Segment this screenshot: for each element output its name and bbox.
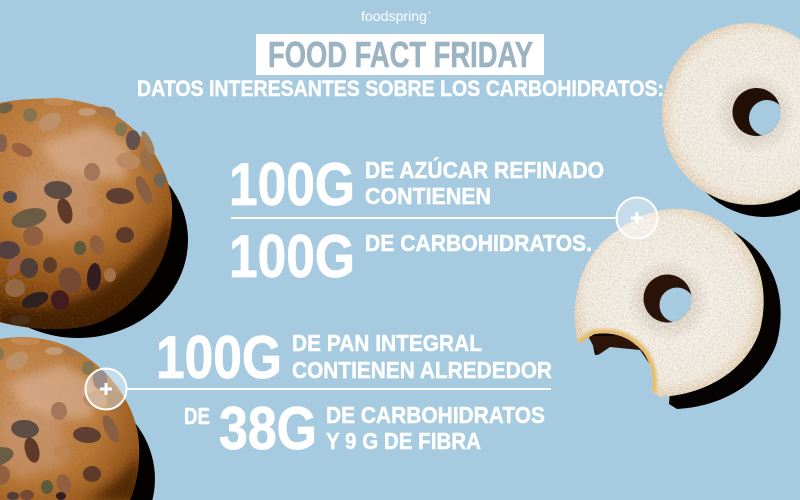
logo: foodspring: foodspring [361,9,427,24]
image: top bread roll [0,97,188,345]
fact: whole grain bread: DE [184,403,210,429]
fact: whole grain bread: 100G [156,324,282,391]
image: bottom bread roll [0,336,155,500]
fact: whole grain bread: DE PAN INTEGRAL [292,330,482,356]
fact: whole grain bread [127,324,552,462]
fact: refined sugar: DE AZÚCAR REFINADO [365,156,604,183]
fact: refined sugar [229,151,618,290]
subtitle: DATOS INTERESANTES SOBRE LOS CARBOHIDRATOS: [137,76,664,101]
fact: refined sugar: 100G [229,151,355,218]
fact: refined sugar: DE CARBOHIDRATOS. [365,230,592,256]
logo: foodspring: ® [428,10,431,15]
fact: whole grain bread: CONTIENEN ALREDEDOR [292,357,552,383]
title: Food Fact Friday: FOOD FACT FRIDAY [268,34,533,75]
fact: whole grain bread: 38G [219,395,317,462]
image: bitten sugar donut [574,208,781,409]
icon: plus circle on donut [616,198,658,238]
image: top sugar donut [662,22,800,217]
fact: refined sugar: 100G [229,223,355,290]
icon: plus circle on bread [86,368,126,410]
fact: refined sugar: CONTIENEN [365,183,491,209]
fact: whole grain bread: Y 9 G DE FIBRA [326,428,481,454]
fact: whole grain bread: DE CARBOHIDRATOS [326,402,545,428]
